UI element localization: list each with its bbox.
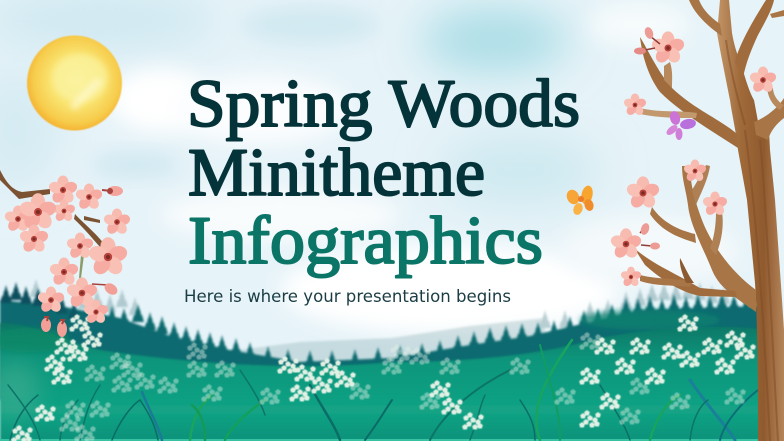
trunk: [717, 0, 784, 441]
title: Minitheme: [188, 134, 485, 210]
right stub branch: [767, 88, 784, 110]
buds: [634, 26, 660, 250]
icon: orange butterfly: [564, 185, 595, 216]
title: [187, 65, 580, 278]
right lower branch: [754, 98, 784, 140]
buds: [41, 186, 123, 337]
title: Infographics: [188, 202, 543, 278]
distant grey forest: [30, 279, 730, 370]
dark forest: [0, 282, 760, 400]
sun: [27, 36, 122, 130]
subtitle: Here is where your presentation begins: [184, 287, 511, 306]
title: Spring Woods: [187, 65, 580, 141]
left cherry blossoms: [4, 175, 131, 337]
small branch: [640, 108, 697, 118]
meadow: [0, 310, 784, 441]
white flowers: left: [11, 314, 236, 441]
white flowers: right: [509, 314, 756, 428]
white flowers: centre: [259, 344, 484, 430]
main left branch: [640, 37, 738, 148]
grass blades: [8, 340, 758, 440]
lower branch cluster: [682, 166, 756, 312]
right cherry blossoms: [609, 26, 777, 288]
tree: trunk and branches: [634, 0, 784, 441]
upper branches: [689, 0, 722, 36]
left cherry branch: [0, 170, 105, 278]
icon: purple butterfly: [665, 110, 697, 140]
